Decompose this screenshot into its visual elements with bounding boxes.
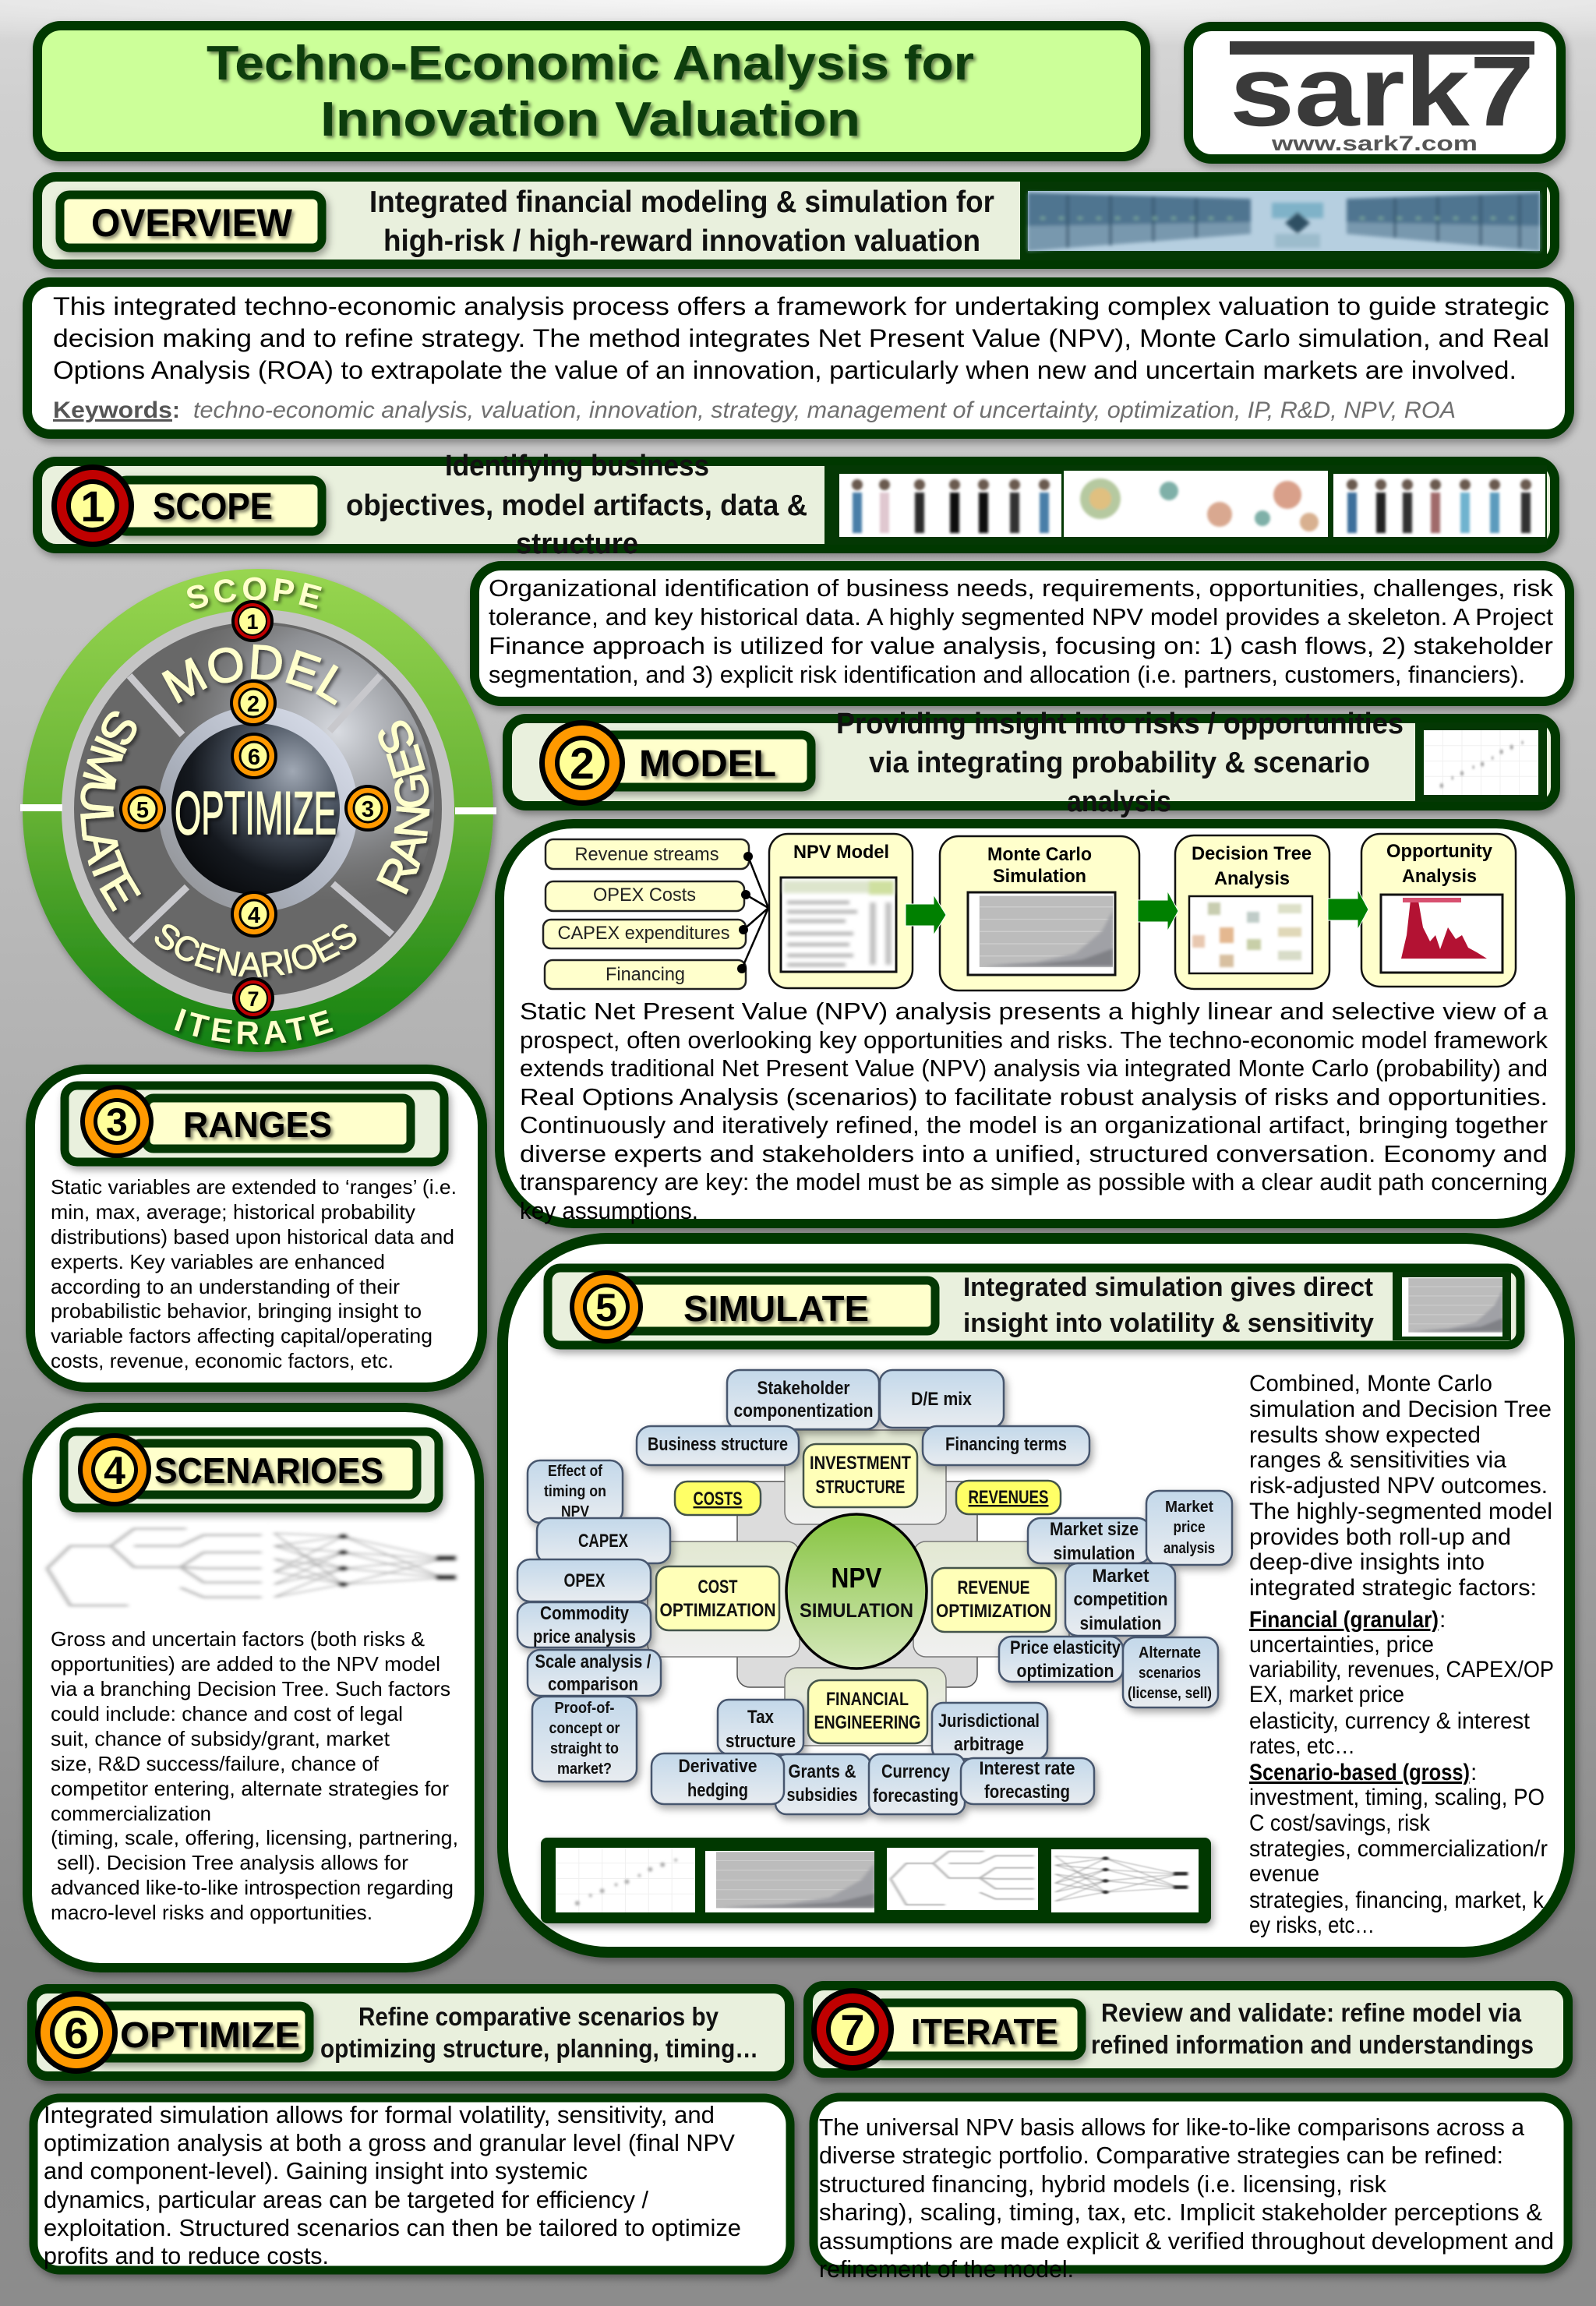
optimize label: OPTIMIZE [120,2015,300,2055]
scenarios header [64,1432,439,1508]
blue box labels: price analysis [533,1626,636,1647]
simulate text: The highly-segmented model [1249,1499,1552,1524]
wheel badge 5 [119,786,166,832]
model paragraph: Static Net Present Value (NPV) analysis presents a highly linear and selective view of a [520,998,1548,1025]
blue factor boxes [517,1370,1232,1814]
wheel labels [80,577,433,1049]
scenarios text [51,1627,458,1924]
badge 5 [570,1270,643,1344]
badge 2 [539,720,625,806]
wheel labels: RANGES [376,720,433,898]
panel: overview header [37,177,1555,264]
blue box labels: timing on [544,1483,606,1500]
panel: scope text: segmentation, and 3) explicit risk identification and allocation (i.e. partners, customers, financiers). [489,661,1525,688]
simulate text: Scenario-based (gross) [1249,1760,1470,1785]
wheel labels: OPTIMIZE [175,779,337,847]
title panel [37,26,1146,157]
blue box labels: Price elasticity [1010,1637,1121,1658]
overview image [1020,182,1547,260]
outer green ring [23,569,493,1052]
blue box labels: Jurisdictional [938,1711,1040,1732]
badge 1: 1 [80,482,105,531]
results image strip [541,1838,1211,1923]
badge 3: 3 [106,1100,128,1144]
simulate text: EX, market price [1249,1682,1404,1707]
scope subtitle: Identifying business [445,450,709,482]
simulate text: Financial (granular) [1249,1607,1439,1633]
scenarios text: sell). Decision Tree analysis allows for [57,1851,408,1874]
model paragraph: diverse experts and stakeholders into a unified, structured conversation. Economy and [520,1140,1548,1167]
simulate text: ranges & sensitivities via [1249,1447,1506,1473]
panel: scope text: Finance approach is utilized for value analysis, focusing on: 1) cash flows, 2) stakeholder [489,632,1553,659]
simulate text: elasticity, currency & interest [1249,1708,1531,1734]
category labels [659,1453,1051,1733]
blue box labels: hedging [687,1780,748,1801]
keywords: : [172,397,180,423]
panel: iterate text: refinement of the model. [819,2255,1074,2283]
panel: optimize text: dynamics, particular areas can be targeted for efficiency / [44,2186,648,2213]
simulate text: evenue [1249,1861,1319,1887]
blue box labels: Grants & [789,1761,856,1782]
logo panel [1188,26,1561,159]
wheel labels: SCOPE [187,577,326,613]
category labels: REVENUE [957,1577,1030,1598]
flow: Monte Carlo [940,836,1139,991]
panel: iterate text [814,2097,1568,2283]
flow: Monte Carlo: Simulation [993,866,1086,887]
panel: optimize header [32,1989,789,2076]
badge 4: 4 [104,1449,125,1492]
wheel badge 4: 4 [248,903,260,928]
intro paragraph: This integrated techno-economic analysis process offers a framework for undertaking complex valuation to guide strategic [53,292,1549,320]
blue box labels: comparison [548,1674,638,1695]
simulate text: ey risks, etc… [1249,1912,1375,1938]
input boxes [543,839,768,989]
flow: opportunity analysis: Analysis [1402,866,1477,887]
wheel badge 4 [231,891,277,938]
iterate label: ITERATE [911,2011,1058,2052]
simulate text: strategies, commercialization/r [1249,1836,1548,1862]
overview subtitle: Integrated financial modeling & simulation for [369,185,994,219]
category labels: COST [698,1577,738,1598]
simulate subtitle: insight into volatility & sensitivity [963,1308,1374,1338]
blue box labels: simulation [1054,1543,1135,1564]
ranges text: according to an understanding of their [51,1275,400,1298]
optimize subtitle: Refine comparative scenarios by [358,2002,719,2031]
model paragraph: transparency are key: the model must be as simple as possible with a clear audit path concerning [520,1168,1548,1195]
overview label [60,195,322,248]
simulate subtitle: Integrated simulation gives direct [963,1273,1373,1302]
blue box labels: Tax [747,1707,775,1728]
overview subtitle [369,185,994,258]
model paragraph: extends traditional Net Present Value (NPV) analysis via integrated Monte Carlo (probability) and [520,1054,1548,1082]
blue box labels: componentization [734,1400,873,1421]
model subtitle [836,708,1404,818]
simulate text: deep-dive insights into [1249,1549,1485,1575]
scenarios text: could include: chance and cost of legal [51,1702,403,1725]
blue box labels: market? [557,1760,612,1778]
flow: NPV model [769,834,913,988]
panel: model header [507,708,1555,818]
logo bar [1230,41,1534,55]
process wheel [20,569,500,1060]
model thumbnail [1415,722,1547,802]
scope subtitle [346,450,807,560]
panel: scope text [475,566,1570,701]
flow: opportunity analysis: Opportunity [1386,841,1493,862]
panel: optimize text: and component-level). Gaining insight into systemic [44,2157,588,2184]
white ticks [20,804,62,811]
simulate text: investment, timing, scaling, PO [1249,1785,1545,1810]
panel: iterate text: structured financing, hybrid models (i.e. licensing, risk [819,2170,1386,2198]
blue box labels: Market size [1050,1519,1139,1540]
iterate label [873,2003,1082,2056]
blue box labels: Financing terms [945,1434,1067,1455]
wheel labels: SIMULATE [80,711,144,915]
blue box labels: competition [1074,1589,1167,1610]
model label: MODEL [639,743,776,785]
simulate text: integrated strategic factors: [1249,1575,1537,1601]
panel: iterate text: diverse strategic portfolio. Comparative strategies can be refined: [819,2142,1503,2169]
wheel badge 7: 7 [247,987,260,1011]
blue box labels: scenarios [1139,1665,1201,1682]
wheel labels: SCENARIOES [154,924,360,980]
model subtitle: Providing insight into risks / opportunities [836,708,1404,740]
flow: decision tree [1175,835,1329,989]
model label [592,735,811,787]
wheel badge 3 [344,785,391,832]
optimize subtitle [320,2002,758,2063]
simulate text: results show expected [1249,1422,1481,1448]
intro paragraph [53,292,1549,384]
input boxes: OPEX Costs [593,885,696,906]
blue box labels: optimization [1016,1661,1114,1682]
scope subtitle: structure [516,528,638,560]
panel: optimize text: exploitation. Structured scenarios can then be tailored to optimize [44,2214,741,2241]
wheel labels: ITERATE [175,1008,337,1049]
flow: NPV model: NPV Model [793,842,889,863]
ranges text: costs, revenue, economic factors, etc. [51,1349,394,1372]
scenarios text: suit, chance of subsidy/grant, market [51,1727,390,1750]
scope label: SCOPE [153,486,273,528]
panel: model body [500,824,1570,1224]
blue box labels: price [1174,1519,1205,1536]
wheel badge 6 [231,733,277,779]
category labels: STRUCTURE [815,1477,906,1498]
panel: optimize text: Integrated simulation allows for formal volatility, sensitivity, and [44,2101,715,2128]
wheel badge 1 [231,600,274,642]
scope images [824,465,1547,545]
blue box labels: D/E mix [911,1389,973,1410]
simulate text: : [1439,1607,1446,1633]
wheel badge 7 [232,977,274,1019]
model paragraph: prospect, often overlooking key opportunities and risks. The techno-economic model framework [520,1026,1548,1054]
model paragraph: Continuously and iteratively refined, the model is an organizational artifact, bringing together [520,1111,1548,1139]
overview label: OVERVIEW [91,201,293,245]
simulate text: : [1471,1760,1477,1785]
ranges text [51,1175,457,1372]
model paragraph: Real Options Analysis (scenarios) to facilitate robust analysis of risks and opportunities. [520,1083,1548,1111]
ranges header: RANGES [183,1104,332,1145]
panel: scope header [37,450,1555,560]
ranges header [65,1086,444,1162]
model subtitle: via integrating probability & scenario [869,747,1370,779]
scenario tree image [41,1524,471,1613]
iterate subtitle: Review and validate: refine model via [1101,1998,1522,2027]
simulate text: Combined, Monte Carlo [1249,1371,1492,1397]
badge 6 [35,1991,118,2074]
ranges text: distributions) based upon historical data and [51,1225,454,1248]
scenarios header: SCENARIOES [154,1450,383,1491]
blue box labels: (license, sell) [1128,1685,1212,1702]
input boxes: Financing [606,964,685,985]
panel: iterate header [808,1986,1568,2073]
yellow category boxes [656,1444,1061,1743]
panel: iterate text: The universal NPV basis allows for like-to-like comparisons across a [819,2114,1525,2141]
scenarios text: commercialization [51,1802,211,1825]
intro paragraph: Options Analysis (ROA) to extrapolate the value of an innovation, particularly when new and uncertain markets are involved. [53,356,1517,384]
title [207,37,974,147]
iterate subtitle [1091,1998,1534,2059]
scenarios text: via a branching Decision Tree. Such factors [51,1677,450,1700]
NPV simulation hub: NPV [831,1562,882,1594]
wheel badge 2 [230,680,277,726]
arrow 3 [1328,889,1368,930]
blue box labels: Business structure [648,1434,788,1455]
blue box labels: simulation [1080,1613,1161,1634]
badge 4 [78,1433,151,1506]
blue box labels: Market [1093,1566,1149,1587]
simulate header [548,1268,1520,1345]
blue box labels: Currency [881,1761,951,1782]
keywords: Keywords [53,397,172,423]
simulate text: simulation and Decision Tree [1249,1397,1552,1422]
panel: scope text: tolerance, and key historical data. A highly segmented NPV model provides a skeleton. A Project [489,603,1553,630]
blue box labels: Market [1165,1499,1213,1516]
simulate text: C cost/savings, risk [1249,1810,1431,1836]
category labels: FINANCIAL [826,1689,909,1710]
ranges text: Static variables are extended to ‘ranges’ (i.e. [51,1175,457,1199]
blue box labels: subsidies [787,1785,857,1806]
mind map [517,1370,1232,1814]
simulate text: provides both roll-up and [1249,1524,1511,1550]
badge 5: 5 [595,1286,617,1330]
blue box labels [533,1378,1215,1806]
badge 7 [811,1988,894,2071]
simulate subtitle [963,1273,1374,1338]
panel: ranges [30,1069,482,1387]
panel: optimize text: profits and to reduce costs. [44,2242,329,2269]
badge 7: 7 [840,2005,865,2054]
panel: iterate text: assumptions are made explicit & verified throughout development and [819,2227,1554,2255]
intro paragraph: decision making and to refine strategy. The method integrates Net Present Value (NPV), Monte Carlo simulation, and Real [53,324,1549,352]
backing shapes [648,1430,1069,1746]
scope subtitle: objectives, model artifacts, data & [346,489,807,522]
scenarios text: competitor entering, alternate strategies for [51,1777,449,1800]
simulate text: rates, etc… [1249,1733,1355,1759]
ranges text: variable factors affecting capital/operating [51,1324,433,1347]
scenarios text: Gross and uncertain factors (both risks & [51,1627,425,1651]
blue box labels: forecasting [984,1782,1070,1803]
inner ring [158,706,358,912]
model paragraph [520,998,1548,1224]
wheel badge 6: 6 [248,745,260,770]
wheel labels: MODEL [161,644,342,709]
simulate header: SIMULATE [683,1288,869,1329]
arrow 1 [906,895,946,935]
blue box labels: forecasting [873,1785,959,1806]
blue box labels: analysis [1163,1540,1215,1557]
blue box labels: Scale analysis / [535,1651,651,1672]
category labels: COSTS [694,1488,742,1510]
blue box labels: Interest rate [979,1758,1075,1779]
panel: scope text: Organizational identification of business needs, requirements, opportunities, challenges, risk [489,574,1554,602]
flow: decision tree: Decision Tree [1192,843,1312,864]
simulate text [1249,1371,1554,1938]
simulate text: variability, revenues, CAPEX/OP [1249,1657,1554,1683]
panel: simulate [503,1238,1570,1952]
panel: optimize text: optimization analysis at both a gross and granular level (final NPV [44,2129,735,2156]
optimize subtitle: optimizing structure, planning, timing… [320,2034,758,2063]
panel: intro text [27,282,1570,434]
model paragraph: key assumptions. [520,1197,698,1224]
blue box labels: Stakeholder [757,1378,849,1399]
flow: opportunity analysis [1361,834,1516,987]
scenarios text: size, R&D success/failure, chance of [51,1752,380,1775]
input boxes: CAPEX expenditures [558,923,729,944]
centre sphere [171,723,340,895]
model subtitle: analysis [1067,786,1171,818]
blue box labels: concept or [549,1720,620,1737]
scenarios text: (timing, scale, offering, licensing, partnering, [51,1826,458,1849]
badge 1 [51,464,134,547]
scope label [117,480,322,531]
category labels: INVESTMENT [810,1453,911,1474]
wheel badge 5: 5 [136,798,149,823]
category labels: OPTIMIZATION [936,1601,1051,1622]
NPV simulation hub [786,1514,927,1669]
category labels: OPTIMIZATION [659,1600,776,1621]
optimize label [94,2006,309,2058]
blue box labels: Alternate [1139,1644,1201,1662]
simulate text: risk-adjusted NPV outcomes. [1249,1473,1548,1499]
blue box labels: Derivative [678,1756,757,1777]
wheel badge 1: 1 [246,610,259,634]
blue box labels: CAPEX [578,1531,628,1552]
scenarios text: macro-level risks and opportunities. [51,1901,373,1924]
blue box labels: Proof-of- [555,1700,614,1717]
blue box labels: NPV [561,1503,590,1520]
simulate text: uncertainties, price [1249,1632,1434,1658]
keywords: techno-economic analysis, valuation, innovation, strategy, management of uncertainty, optimization, IP, R&D, NPV, ROA [193,397,1456,423]
title: Innovation Valuation [320,93,860,147]
blue box labels: Commodity [540,1603,630,1624]
simulate text: strategies, financing, market, k [1249,1888,1545,1913]
category labels: REVENUES [968,1487,1049,1508]
wheel badge 3: 3 [362,797,374,822]
panel: iterate text: sharing), scaling, timing, tax, etc. Implicit stakeholder perceptions & [819,2198,1542,2226]
category labels: ENGINEERING [814,1712,921,1733]
badge 2: 2 [570,739,595,789]
blue box labels: structure [726,1731,796,1752]
flow: Monte Carlo: Monte Carlo [987,844,1092,865]
badge 3 [80,1085,154,1158]
panel: scenarios [27,1407,479,1968]
badge 6: 6 [64,2008,89,2057]
segmented disc [74,622,442,996]
overview subtitle: high-risk / high-reward innovation valuation [383,224,980,258]
logo url: www.sark7.com [1271,132,1478,155]
iterate subtitle: refined information and understandings [1091,2030,1534,2059]
ranges text: experts. Key variables are enhanced [51,1250,385,1273]
ranges text: probabilistic behavior, bringing insight to [51,1299,422,1323]
blue box labels: Effect of [548,1463,602,1480]
scenarios text: opportunities) are added to the NPV model [51,1652,440,1676]
flow: decision tree: Analysis [1214,868,1290,889]
NPV simulation hub: SIMULATION [800,1600,913,1622]
ranges text: min, max, average; historical probability [51,1200,415,1224]
blue box labels: OPEX [564,1570,605,1591]
panel: optimize text [34,2098,790,2270]
wheel badge 2: 2 [247,692,260,717]
blue box labels: arbitrage [954,1734,1024,1755]
logo wordmark: sark7 [1230,36,1534,147]
title: Techno-Economic Analysis for [207,37,974,90]
arrow 2 [1138,891,1178,931]
input boxes: Revenue streams [575,844,719,865]
scenarios text: advanced like-to-like introspection regarding [51,1876,454,1899]
blue box labels: straight to [550,1740,619,1757]
